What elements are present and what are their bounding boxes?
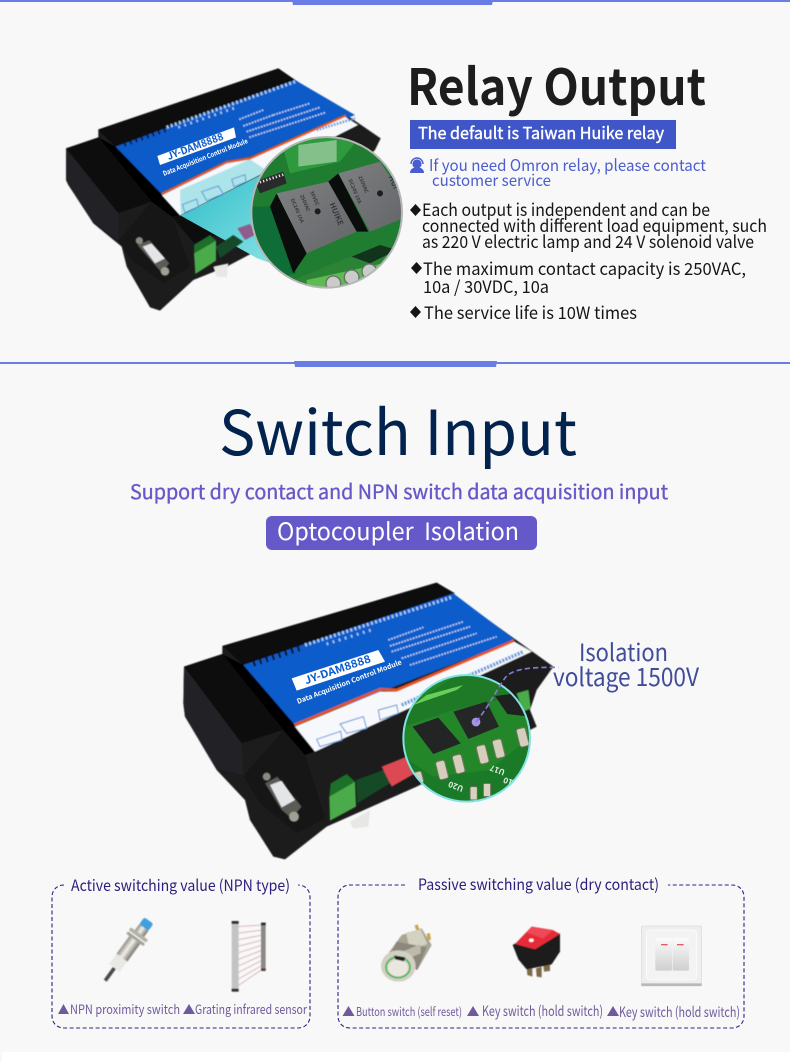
device label plate: Data Acquisition Control Module: [161, 135, 249, 178]
magnifier lens: relays: [250, 135, 403, 293]
white terminal strip: [161, 115, 358, 216]
device photo: relay output: [66, 68, 403, 311]
magnifier lens: optocouplers: U17: [488, 762, 507, 778]
magnifier lens: relays: 30VDC: [308, 190, 321, 208]
magnifier lens: optocouplers: C10: [502, 774, 519, 789]
device body: [183, 583, 553, 859]
caption: key switch second: Key switch (hold switch): [619, 1002, 740, 1022]
magnifier lens: relays: 250VAC: [298, 193, 312, 214]
bullet: service life: The service life is 10W times: [424, 299, 637, 324]
subtitle: switch support: Support dry contact and NPN switch data acquisition input: [130, 476, 668, 505]
title: switch input: Switch Input: [219, 383, 577, 473]
green terminal block: [194, 224, 257, 277]
callout: isolation voltage: Isolation: [579, 633, 668, 668]
badge: optocoupler isolation: Optocoupler Isolation: [277, 512, 519, 547]
bullet: independent outputs: connected with different load equipment, such: [422, 212, 767, 237]
bullet list: relay features: [410, 196, 767, 324]
panel: passive switching value: [338, 873, 744, 1028]
device photo: switch input: [183, 583, 558, 859]
device label plate: JY-DAM8888: [164, 128, 225, 163]
bullet: contact capacity: 10a / 30VDC, 10a: [423, 273, 549, 298]
top divider bar: [0, 0, 790, 5]
note: omron relay: If you need Omron relay, please contact: [429, 152, 706, 176]
caption: button switch: Button switch (self reset): [356, 1003, 462, 1020]
note: omron relay: [429, 152, 706, 191]
bullet: contact capacity: [411, 255, 746, 298]
magnifier lens: relays: 250VAC: [356, 175, 370, 195]
serial port: [263, 773, 302, 822]
panel heading: Active switching value (NPN type): [71, 874, 290, 896]
callout dashed leader line: [472, 667, 558, 726]
icon: rocker switch: [513, 927, 560, 977]
section divider bar: [0, 361, 790, 367]
caption: button switch: [342, 1003, 462, 1020]
callout: isolation voltage: voltage 1500V: [553, 658, 700, 694]
caption: key switch: Key switch (hold switch): [482, 1001, 603, 1021]
caption: grating infrared sensor: Grating infrared sensor: [195, 999, 308, 1018]
device body: [66, 68, 381, 311]
device label plate: JY-DAM8888: [302, 651, 373, 688]
icon: grating sensor: [232, 921, 266, 992]
icon: button switch: [381, 925, 432, 982]
bullet: independent outputs: [410, 196, 767, 253]
device label plate: Data Acquisition Control Module: [295, 657, 403, 707]
magnifier lens: relays: DC24V 10A: [289, 197, 306, 225]
bullet: independent outputs: Each output is independent and can be: [422, 196, 710, 221]
panel heading: Passive switching value (dry contact): [418, 873, 659, 895]
title: relay output: Relay Output: [407, 48, 706, 120]
callout: isolation voltage: [553, 633, 700, 694]
caption: NPN proximity switch: NPN proximity switch: [70, 999, 180, 1018]
magnifier lens: relays: DC24V 10A: [346, 178, 363, 205]
note: omron relay: customer service: [432, 167, 551, 191]
magnifier lens: relays: HUIKE: [327, 201, 346, 228]
magnifier lens: relays: HUI: [386, 174, 401, 191]
icon: wall switch: [641, 926, 702, 986]
panel: active switching value: [52, 874, 310, 1028]
banner: default relay: The default is Taiwan Huike relay: [418, 120, 664, 144]
icon: proximity sensor: [97, 914, 158, 987]
bullet: contact capacity: The maximum contact capacity is 250VAC,: [423, 255, 746, 280]
green terminal and dip switch: [329, 757, 415, 828]
magnifier lens: optocouplers: U20: [447, 778, 465, 794]
bullet: independent outputs: as 220 V electric lamp and 24 V solenoid valve: [422, 228, 754, 253]
serial port: [136, 237, 169, 276]
icon: customer service: [410, 158, 424, 173]
teal magnifier beam: [181, 174, 290, 270]
magnifier lens: optocouplers: [400, 673, 533, 807]
